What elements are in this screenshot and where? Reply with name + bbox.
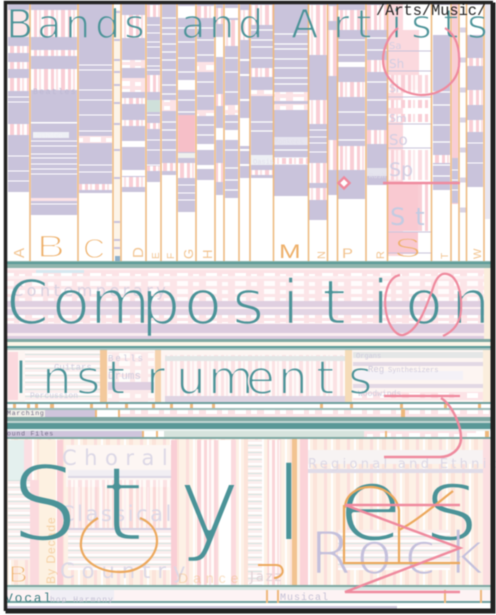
column I	[216, 4, 223, 195]
panel: bands and artists columns	[7, 4, 491, 265]
label: Harmony: hop Harmony	[50, 596, 114, 605]
column J	[225, 4, 238, 198]
column N	[309, 4, 327, 220]
column letters: M	[279, 240, 301, 262]
column letters: P	[342, 246, 353, 262]
heading: Bands and Artists: BandsandArtists	[6, 2, 488, 48]
column letters: A	[11, 248, 28, 258]
panel: vocal strip	[5, 585, 491, 609]
faint labels in instruments: Woodwinds	[358, 390, 401, 399]
column letters: D	[130, 247, 147, 258]
column S: Si	[389, 82, 399, 95]
column letters: N	[316, 251, 328, 259]
column L	[251, 4, 273, 178]
column G	[178, 4, 195, 212]
column O	[328, 4, 337, 195]
column P	[338, 4, 365, 199]
faint labels in instruments: Bells	[108, 354, 145, 364]
faint labels in instruments: Reg	[368, 365, 384, 375]
orange label: By Decade: By Decade	[44, 516, 58, 584]
faint labels in instruments: Percussion	[30, 392, 78, 401]
label: Vocal: Vocal	[5, 591, 53, 606]
column W	[467, 4, 483, 187]
faint band labels: Beatles	[33, 88, 77, 97]
column letters: W	[472, 248, 484, 259]
column A	[8, 4, 29, 192]
column separators	[30, 4, 484, 261]
faint labels in instruments: Drums	[108, 371, 141, 383]
divider band: top of composition	[7, 261, 491, 268]
orange letter: B: B	[9, 562, 27, 587]
icon: pink looped symbol	[385, 274, 461, 336]
column M	[274, 4, 308, 196]
breadcrumb: /Arts/Music/: /Arts/Music/	[376, 2, 486, 20]
index column	[114, 10, 120, 261]
column letters	[14, 236, 482, 260]
faint labels in instruments: Guitars	[54, 363, 92, 373]
column S: So	[389, 131, 408, 149]
column S: Sm	[389, 112, 407, 125]
faint band labels: Rush	[369, 173, 386, 181]
icon: pink diamond	[338, 178, 350, 188]
column E	[147, 4, 160, 182]
column letters: G	[181, 249, 196, 259]
column R	[367, 4, 387, 185]
column B	[31, 4, 77, 215]
faint band labels: Bush&Co	[33, 133, 62, 141]
column C	[79, 4, 112, 193]
column T	[433, 4, 450, 190]
icon: pink horizontal rule	[383, 182, 460, 184]
column S: St	[390, 203, 435, 231]
label: Musical: Musical	[280, 592, 329, 604]
orange small letters: Dance	[178, 570, 243, 586]
icon: orange hook near jazz	[258, 565, 283, 578]
column K	[240, 4, 250, 178]
column V	[460, 4, 466, 214]
column letters: C	[83, 234, 105, 265]
icon: pink hook	[384, 396, 461, 457]
column letters: E	[151, 252, 162, 259]
icon: pink Z symbol	[345, 505, 460, 592]
column S: Sh	[389, 57, 404, 71]
column S: Sp	[389, 159, 413, 181]
faint label: Jazz: Jazz	[249, 570, 283, 585]
column letters: B	[37, 229, 65, 264]
icon: orange loop under t	[81, 518, 157, 572]
column S: Sa	[389, 41, 401, 52]
panel: composition	[7, 268, 491, 340]
column letters: T	[440, 253, 451, 259]
column letters: R	[375, 251, 387, 259]
column letters: F	[166, 253, 177, 259]
icon: pink open circle	[383, 28, 459, 95]
heading: Instruments: Instruments	[14, 351, 372, 406]
faint label: Country: Country	[60, 559, 192, 583]
column letters: S	[394, 233, 421, 263]
label: Sound Files: ound Files	[7, 430, 54, 438]
faint label: Regional and Ethnic: Regional and Ethnic	[308, 457, 496, 472]
column F	[162, 4, 176, 175]
faint labels in instruments: Organs	[356, 353, 381, 361]
faint label: Contemporary: Contemporary	[12, 281, 169, 300]
divider band: top of instruments	[7, 339, 491, 350]
label: Marching: Marching	[7, 410, 45, 417]
panel: styles	[7, 439, 496, 587]
icon: orange arch symbol	[344, 487, 460, 563]
faint band labels: Monkees	[274, 139, 303, 147]
panel: instruments	[7, 350, 491, 402]
column letters: H	[200, 250, 215, 259]
faint heading: Rock: Rock	[310, 519, 485, 589]
faint band labels: Oasis	[253, 159, 274, 167]
faint label: Choral: Choral	[62, 446, 175, 470]
panel: marching and sound files strip	[7, 402, 491, 439]
faint label: Classical: Classical	[60, 502, 174, 526]
heading: Styles: Styles	[11, 443, 479, 566]
heading: Composition: Composition	[6, 266, 490, 339]
column D	[122, 4, 145, 192]
column H	[197, 4, 214, 180]
column S	[388, 4, 435, 259]
faint labels in instruments	[30, 353, 438, 401]
faint labels in instruments: Synthesizers	[388, 367, 438, 375]
column U	[452, 4, 458, 204]
faint band labels	[33, 88, 386, 181]
